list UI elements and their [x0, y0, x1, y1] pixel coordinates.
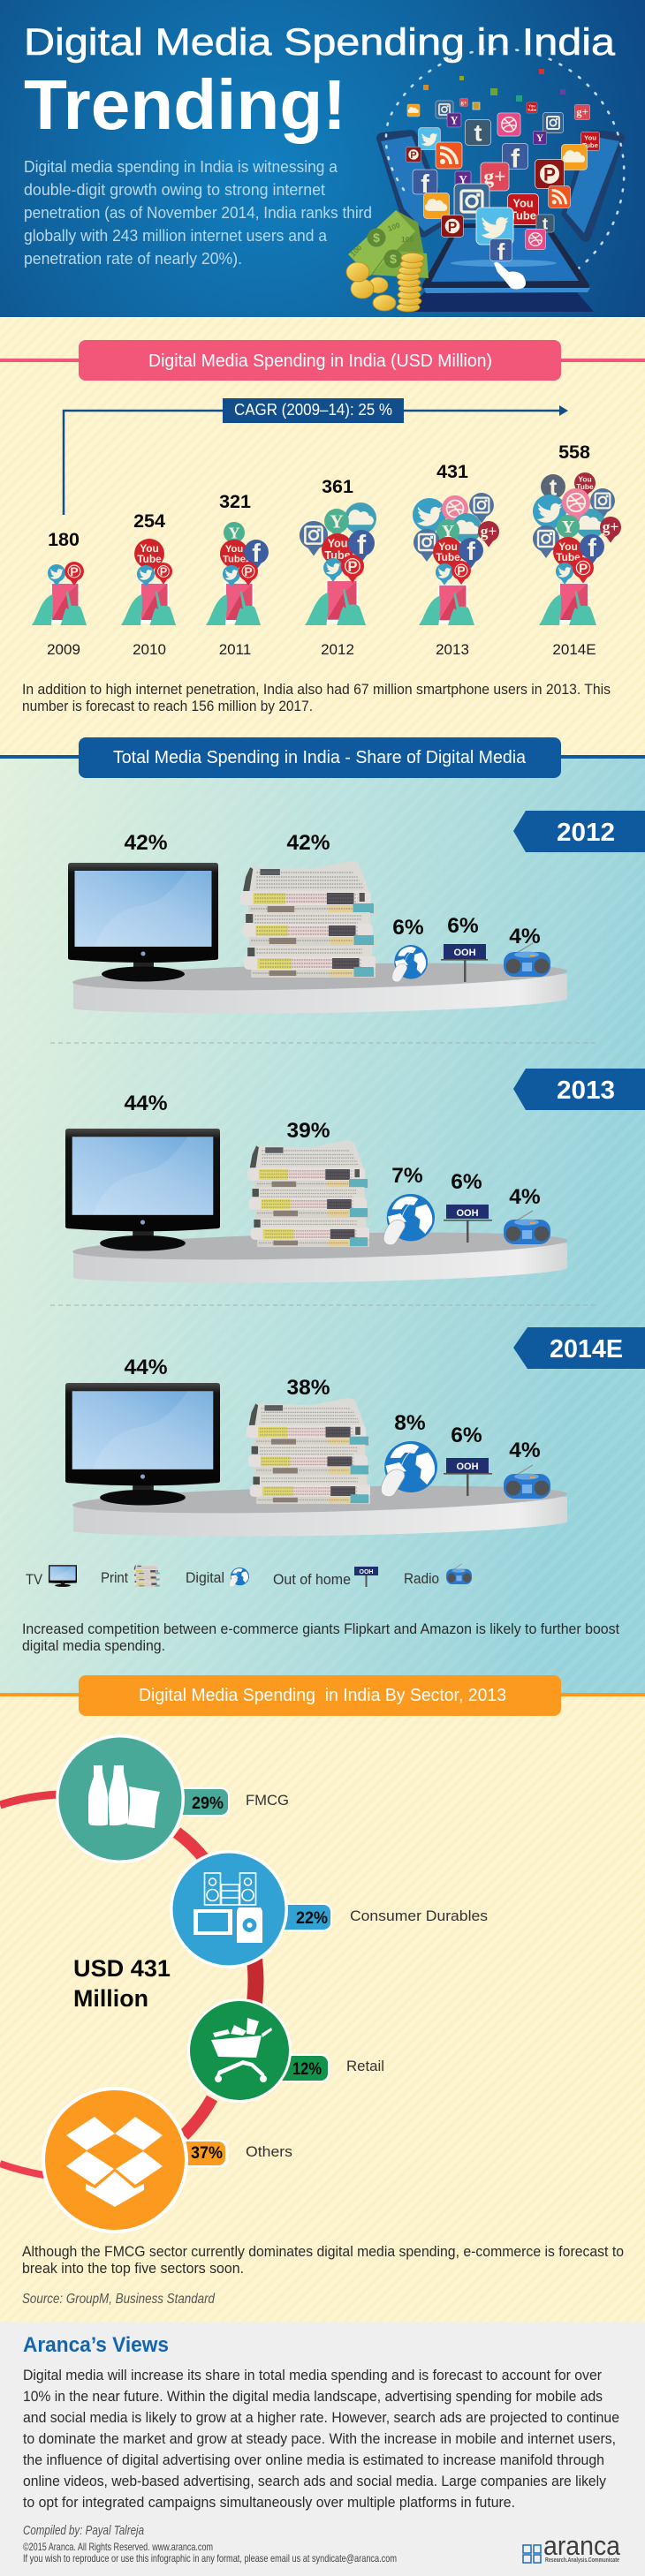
callout: CAGR: CAGR (2009–14): 25 %	[234, 401, 392, 419]
social media icons: g+	[483, 165, 506, 188]
total value: USD 431	[73, 1955, 171, 1982]
subtitle: Trending: Trending!	[24, 65, 346, 144]
digital	[383, 1164, 435, 1245]
social media icons: f	[421, 170, 429, 199]
print	[247, 1119, 371, 1247]
digital: 7%	[391, 1164, 423, 1188]
chart: 2014E value: Y	[562, 517, 575, 537]
sector: Retail: 12%	[292, 2060, 322, 2079]
print: 42%	[286, 831, 330, 855]
heading bar: Digital Media Spending in India (USD Million): Digital Media Spending in India (USD Million)	[148, 351, 492, 371]
social media icons: Tube	[582, 141, 599, 149]
year tag 2013: 2013	[557, 1076, 615, 1105]
out of home: OOH	[456, 1208, 479, 1219]
sector: Consumer Durables: 22%	[296, 1909, 328, 1928]
logo: aranca: Research.Analysis.Communicate	[545, 2557, 619, 2564]
social media icons: Tube	[510, 209, 536, 223]
social media icons: Y	[451, 114, 459, 126]
social media icons: f	[511, 145, 520, 174]
social media icons: Y	[536, 133, 544, 144]
intro text block: globally with 243 million internet users and a	[24, 227, 328, 245]
social media icons	[406, 99, 599, 265]
intro text block: Digital media spending in India is witnessing a	[24, 158, 338, 176]
social media icons: t	[543, 215, 549, 233]
social media icons: t	[474, 119, 482, 147]
out of home: 6%	[447, 914, 479, 938]
chart: 2013 value: You	[438, 540, 458, 553]
social media icons: P	[448, 220, 457, 235]
source: Source: GroupM, Business Standard	[22, 2292, 216, 2307]
text block: smartphone users	[22, 681, 611, 714]
icon: banknotes: 100	[401, 235, 414, 244]
icon: bottles and packet	[88, 1765, 160, 1828]
chart: 2014E value: Tube	[556, 551, 580, 563]
chart: 2014E value: P	[579, 562, 588, 577]
body text: online videos, web-based advertising, search ads and social media. Large companies are likely	[23, 2473, 606, 2489]
chart: 2013 value: f	[467, 538, 475, 566]
print: 39%	[286, 1119, 330, 1143]
compiled by: Compiled by: Payal Talreja	[23, 2523, 144, 2538]
intro text block	[24, 158, 372, 268]
icon: coins	[346, 253, 424, 312]
title: Digital Media Spending in India	[24, 21, 615, 64]
chart: 2014E value: 2014E	[552, 641, 596, 658]
tablet	[422, 223, 590, 293]
heading bar: Digital Media Spending in India (USD Million)	[0, 340, 645, 381]
icon: banknotes	[348, 210, 429, 278]
shelf	[72, 1482, 567, 1537]
heading: Aranca’s Views	[23, 2333, 169, 2357]
chart: 2012 value: Tube	[324, 549, 351, 562]
icon: banknotes: 100	[386, 221, 401, 233]
intro text block: penetration (as of November 2014, India ranks third	[24, 204, 372, 222]
radio: 4%	[509, 1439, 541, 1462]
chart: 2009 value	[32, 529, 87, 658]
chart: 2012 value	[300, 476, 376, 658]
heading bar: By Sector	[0, 1675, 645, 1716]
social media icons: f	[497, 240, 505, 265]
sector: FMCG: 29%	[192, 1794, 224, 1813]
panel: share of digital media background	[0, 757, 645, 1696]
chart: 2013 value: Tube	[436, 551, 460, 563]
body text: Digital media will increase its share in total media spending and is forecast to account for over	[23, 2367, 602, 2383]
chart: 2014E value: g+	[603, 518, 618, 536]
copyright	[23, 2541, 397, 2565]
year tag 2012	[513, 811, 645, 852]
legend: OOH	[360, 1569, 373, 1575]
chart: 2012 value: 2012	[321, 641, 354, 658]
sector: Retail	[187, 1998, 384, 2103]
icon: appliances	[205, 1873, 256, 1905]
total value	[73, 1955, 171, 2012]
chart: 2011 value: You	[225, 544, 243, 555]
digital	[381, 1411, 437, 1497]
tablet shadow	[406, 292, 594, 312]
body text	[23, 2367, 619, 2511]
text block: smartphone users: number is forecast to reach 156 million by 2017.	[22, 698, 313, 714]
heading bar: Total Media Spending: Total Media Spending in India - Share of Digital Media	[113, 748, 527, 767]
print	[240, 831, 377, 978]
text block: e-commerce competition: Increased competition between e-commerce giants Flipkart and Amazon is likely to further boost	[22, 1620, 619, 1637]
chart: sector ring	[0, 1734, 488, 2233]
icon: pointing hand	[494, 262, 526, 290]
text block: e-commerce competition	[22, 1620, 619, 1654]
text block: e-commerce competition: digital media spending.	[22, 1637, 165, 1654]
chart: 2010 value	[121, 510, 176, 658]
divider	[50, 1304, 598, 1306]
social media icons: Y	[459, 173, 467, 186]
chart: 2010 value: 254	[133, 510, 165, 532]
TV	[65, 1356, 220, 1505]
chart: 2012 value: 361	[322, 476, 353, 497]
chart: 2010 value: You	[140, 542, 159, 555]
page background: cream	[0, 317, 645, 759]
out of home: 6%	[451, 1170, 482, 1194]
chart: 2014E value: 558	[558, 442, 590, 463]
legend: Out of home	[273, 1571, 351, 1588]
divider	[50, 1042, 598, 1044]
body text: to opt for integrated campaigns simultaneously over multiple platforms in future.	[23, 2494, 515, 2511]
chart: 2013 value: g+	[481, 523, 497, 540]
chart: 2013 value: 431	[436, 461, 468, 482]
chart: 2011 value: P	[244, 564, 253, 578]
social media icons: You	[584, 134, 596, 142]
callout: CAGR	[223, 398, 404, 423]
panel: hero header	[0, 0, 645, 317]
sector: FMCG	[56, 1734, 289, 1863]
radio	[504, 1185, 550, 1244]
year tag 2014E	[513, 1327, 645, 1369]
chart: 2009 value: 180	[48, 529, 80, 550]
panel: 2014E media shares	[65, 1327, 645, 1537]
sector: Others: Others	[246, 2143, 292, 2160]
sector: Others	[42, 2087, 292, 2233]
TV: 44%	[124, 1356, 168, 1379]
panel: 2013 media shares	[65, 1069, 645, 1283]
out of home	[444, 1424, 492, 1496]
panel: 2012 media shares	[68, 811, 645, 1014]
chart: 2013 value: P	[457, 563, 466, 578]
out of home	[444, 1170, 492, 1243]
chart: 2009 value: P	[70, 564, 79, 578]
chart: 2010 value: 2010	[133, 641, 166, 658]
TV	[65, 1092, 220, 1250]
sector: Consumer Durables	[170, 1850, 488, 1968]
chart: 2011 value	[206, 491, 269, 658]
ring segments	[0, 1794, 256, 2175]
chart: 2013 value: 2013	[436, 641, 469, 658]
social media icons: g+	[460, 100, 467, 106]
logo: aranca	[523, 2530, 621, 2564]
legend: TV	[26, 1571, 43, 1588]
icon: shopping cart	[211, 2018, 272, 2082]
logo: aranca: aranca	[543, 2530, 621, 2561]
icon: banknotes: 100	[348, 243, 364, 258]
copyright: ©2015 Aranca. All Rights Reserved. www.aranca.com	[23, 2541, 213, 2553]
chart: 2014E value: t	[550, 473, 558, 500]
chart: 2010 value: Tube	[137, 553, 162, 565]
sector: FMCG: FMCG	[246, 1792, 289, 1809]
icon: banknotes: $	[390, 252, 397, 266]
chart: 2012 value: Y	[330, 510, 344, 532]
sector: Retail: Retail	[346, 2058, 384, 2074]
text block: smartphone users: In addition to high internet penetration, India also had 67 million smartphone users in 2013. This	[22, 681, 611, 698]
intro text block: double-digit growth owing to strong internet	[24, 181, 325, 199]
heading bar: Total Media Spending	[0, 737, 645, 778]
chart: 2014E value: You	[558, 540, 578, 553]
icon: box	[66, 2117, 163, 2207]
chart: 2011 value: f	[252, 540, 261, 568]
TV: 44%	[124, 1092, 168, 1115]
print	[247, 1376, 372, 1504]
sector: Others: 37%	[191, 2144, 223, 2163]
legend: Radio	[404, 1570, 439, 1587]
chart: 2014E value: Tube	[576, 482, 594, 491]
radio: 4%	[509, 925, 541, 948]
radio: 4%	[509, 1185, 541, 1209]
year tag 2014E: 2014E	[550, 1335, 623, 1364]
intro text block: penetration rate of nearly 20%).	[24, 250, 242, 268]
text block: FMCG sector	[22, 2243, 624, 2277]
chart: 2011 value: 2011	[219, 641, 251, 658]
chart: 2011 value: Y	[228, 524, 240, 541]
chart: 2012 value: P	[347, 558, 358, 575]
out of home: OOH	[453, 948, 476, 958]
social media icons: You	[512, 197, 534, 210]
out of home: 6%	[451, 1424, 482, 1447]
chart: 2013 value	[413, 461, 499, 658]
text block: FMCG sector: break into the top five sectors soon.	[22, 2260, 244, 2277]
arrow: CAGR growth	[64, 398, 568, 515]
right phone	[561, 130, 625, 242]
shelf	[72, 1228, 567, 1283]
chart: 2011 value: 321	[219, 491, 251, 512]
floating squares	[423, 69, 565, 102]
chart: 2014E value: You	[578, 474, 592, 483]
chart: 2011 value: Tube	[223, 555, 246, 565]
digital	[392, 916, 428, 982]
social media icons: P	[410, 150, 417, 161]
digital: 6%	[392, 916, 424, 940]
social media icons: Tube	[527, 108, 537, 112]
TV	[68, 831, 218, 982]
panel: sector background	[0, 1695, 645, 2322]
body text: to dominate the market and grow at steady pace. With the increase in mobile and internet users,	[23, 2430, 616, 2447]
radio	[504, 925, 550, 977]
out of home: OOH	[456, 1462, 479, 1472]
social media icons: You	[528, 104, 535, 109]
chart: 2010 value: P	[160, 565, 168, 578]
left phone	[376, 130, 451, 238]
heading bar: By Sector: Digital Media Spending in India By Sector, 2013	[139, 1686, 506, 1705]
out of home	[441, 914, 488, 982]
radio	[504, 1439, 550, 1499]
chart: 2014E value	[533, 442, 621, 658]
social media icons: P	[543, 165, 556, 185]
digital: 8%	[394, 1411, 426, 1435]
panel: Aranca's Views	[0, 2322, 645, 2576]
copyright: If you wish to reproduce or use this infographic in any format, please email us at syndicate@aranca.com	[23, 2552, 397, 2565]
dotted circle	[386, 49, 624, 293]
chart: 2012 value: You	[328, 538, 347, 550]
illustration: phones, tablet, social icons and money	[346, 49, 625, 312]
chart: 2012 value: f	[357, 529, 367, 560]
chart: 2014E value: f	[588, 534, 596, 563]
print: 38%	[286, 1376, 330, 1400]
shelf	[72, 959, 567, 1014]
sector: Consumer Durables: Consumer Durables	[350, 1907, 488, 1924]
body text: 10% in the near future. Within the digital media landscape, advertising spending for mobile ads	[23, 2388, 603, 2405]
icon: banknotes: $	[373, 230, 380, 245]
social media icons: g+	[576, 106, 588, 118]
total value: Million	[73, 1985, 148, 2012]
legend: Print	[101, 1569, 128, 1586]
TV: 42%	[124, 831, 168, 855]
year tag 2012: 2012	[557, 819, 615, 847]
legend	[26, 1564, 472, 1588]
body text: the influence of digital advertising over online media is estimated to increase manifold through	[23, 2451, 604, 2468]
chart: 2013 value: Y	[442, 522, 455, 541]
year tag 2013	[513, 1069, 645, 1110]
chart: 2009 value: 2009	[47, 641, 80, 658]
legend: Digital	[186, 1569, 224, 1586]
